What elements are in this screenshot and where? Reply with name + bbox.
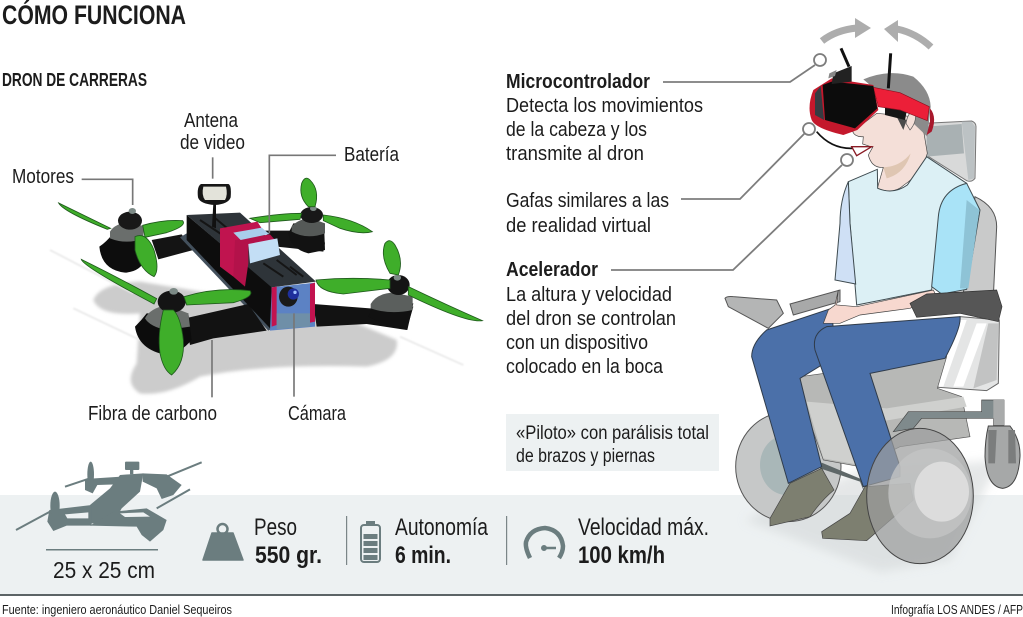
headrest <box>923 121 976 181</box>
stat: velocidad: Velocidad máx. <box>578 514 709 541</box>
bottom specification band <box>0 495 1023 594</box>
text: microcontrolador: transmite al dron <box>506 143 644 165</box>
drone part labels: de video <box>180 132 245 154</box>
neck and face <box>853 113 927 191</box>
ear <box>906 111 916 130</box>
right armrest <box>910 290 1002 322</box>
drone shadow <box>93 282 397 394</box>
hair <box>863 73 931 137</box>
drone part labels <box>12 110 400 425</box>
rear arms <box>152 231 325 259</box>
leader lines <box>82 155 336 397</box>
size dimension <box>46 549 158 583</box>
left sleeve <box>835 182 856 284</box>
left shoe <box>770 468 834 526</box>
title: CÓMO FUNCIONA <box>2 0 186 30</box>
caster wheel <box>985 426 1020 488</box>
stat: autonomia: Autonomía <box>395 514 489 541</box>
text: acelerador: colocado en la boca <box>506 356 664 378</box>
text: gafas <box>506 190 669 237</box>
head movement arrows <box>822 18 931 47</box>
stat: autonomia: 6 min. <box>395 542 451 569</box>
shirt <box>848 157 967 305</box>
subtitle: DRON DE CARRERAS <box>2 70 147 90</box>
stat: peso: 550 gr. <box>255 542 322 569</box>
stat: velocidad: 100 km/h <box>578 542 665 569</box>
stat: velocidad <box>578 514 709 569</box>
rear motors <box>99 206 325 273</box>
near leg <box>814 317 960 487</box>
text: gafas: de realidad virtual <box>506 215 651 237</box>
text: acelerador <box>506 259 676 378</box>
text: acelerador: del dron se controlan <box>506 308 676 330</box>
goggle antennas <box>841 48 891 88</box>
divider <box>346 516 347 565</box>
drone part labels: Batería <box>344 144 400 166</box>
drone part labels: Cámara <box>288 403 347 425</box>
divider <box>506 516 507 565</box>
drone silhouette <box>16 462 202 542</box>
text: microcontrolador <box>506 71 703 165</box>
drone part labels: Antena <box>184 110 239 132</box>
front arms <box>185 304 413 345</box>
battery with straps <box>220 222 280 287</box>
text: microcontrolador: Detecta los movimientos <box>506 95 703 117</box>
near shoe <box>822 483 913 541</box>
hands and forearm <box>823 290 937 323</box>
text: acelerador: con un dispositivo <box>506 332 648 354</box>
icon: weight <box>203 524 243 560</box>
front motors <box>135 275 413 355</box>
text: gafas: Gafas similares a las <box>506 190 669 212</box>
goggles <box>810 66 934 135</box>
callout lines with ring markers <box>611 54 853 270</box>
band rule <box>0 594 1023 596</box>
mouth controller <box>817 132 872 156</box>
rear propellers <box>59 178 372 277</box>
callout: piloto: «Piloto» con parálisis total <box>516 423 709 444</box>
text: acelerador: La altura y velocidad <box>506 284 672 306</box>
drone part labels: Fibra de carbono <box>88 403 217 425</box>
footrest bar <box>820 463 863 490</box>
callout: piloto <box>506 414 719 471</box>
drone part labels: Motores <box>12 166 74 188</box>
callout: piloto: de brazos y piernas <box>516 446 655 467</box>
far leg <box>752 308 833 483</box>
seat cushion <box>937 317 999 391</box>
icon: battery <box>361 521 380 562</box>
wheelchair shadow <box>745 460 1005 572</box>
carbon frame edge <box>180 233 275 331</box>
pilot upper body and wheelchair back <box>810 48 997 305</box>
camera housing <box>270 283 315 331</box>
icon: speedometer <box>526 528 563 558</box>
text: microcontrolador: Microcontrolador <box>506 71 650 93</box>
rear wheel <box>736 412 841 522</box>
stat: peso <box>254 514 322 569</box>
front wheel translucent <box>867 428 973 564</box>
drone illustration <box>50 155 482 397</box>
backrest <box>963 197 997 297</box>
text: acelerador: Acelerador <box>506 259 598 281</box>
source credit: Fuente: ingeniero aeronáutico Daniel Sequeiros <box>2 602 232 617</box>
chair base <box>800 357 970 467</box>
stat: peso: Peso <box>254 514 297 541</box>
body top plate <box>187 213 316 287</box>
body side <box>187 215 272 330</box>
size dimension: 25 x 25 cm <box>53 557 155 583</box>
left armrest <box>725 297 783 328</box>
text: microcontrolador: de la cabeza y los <box>506 119 647 141</box>
video antenna <box>198 184 231 228</box>
caster fork <box>893 400 1004 432</box>
front propellers <box>81 241 482 375</box>
stat: autonomia <box>395 514 489 569</box>
wheelchair and legs <box>725 290 1020 564</box>
right sleeve <box>932 183 980 294</box>
